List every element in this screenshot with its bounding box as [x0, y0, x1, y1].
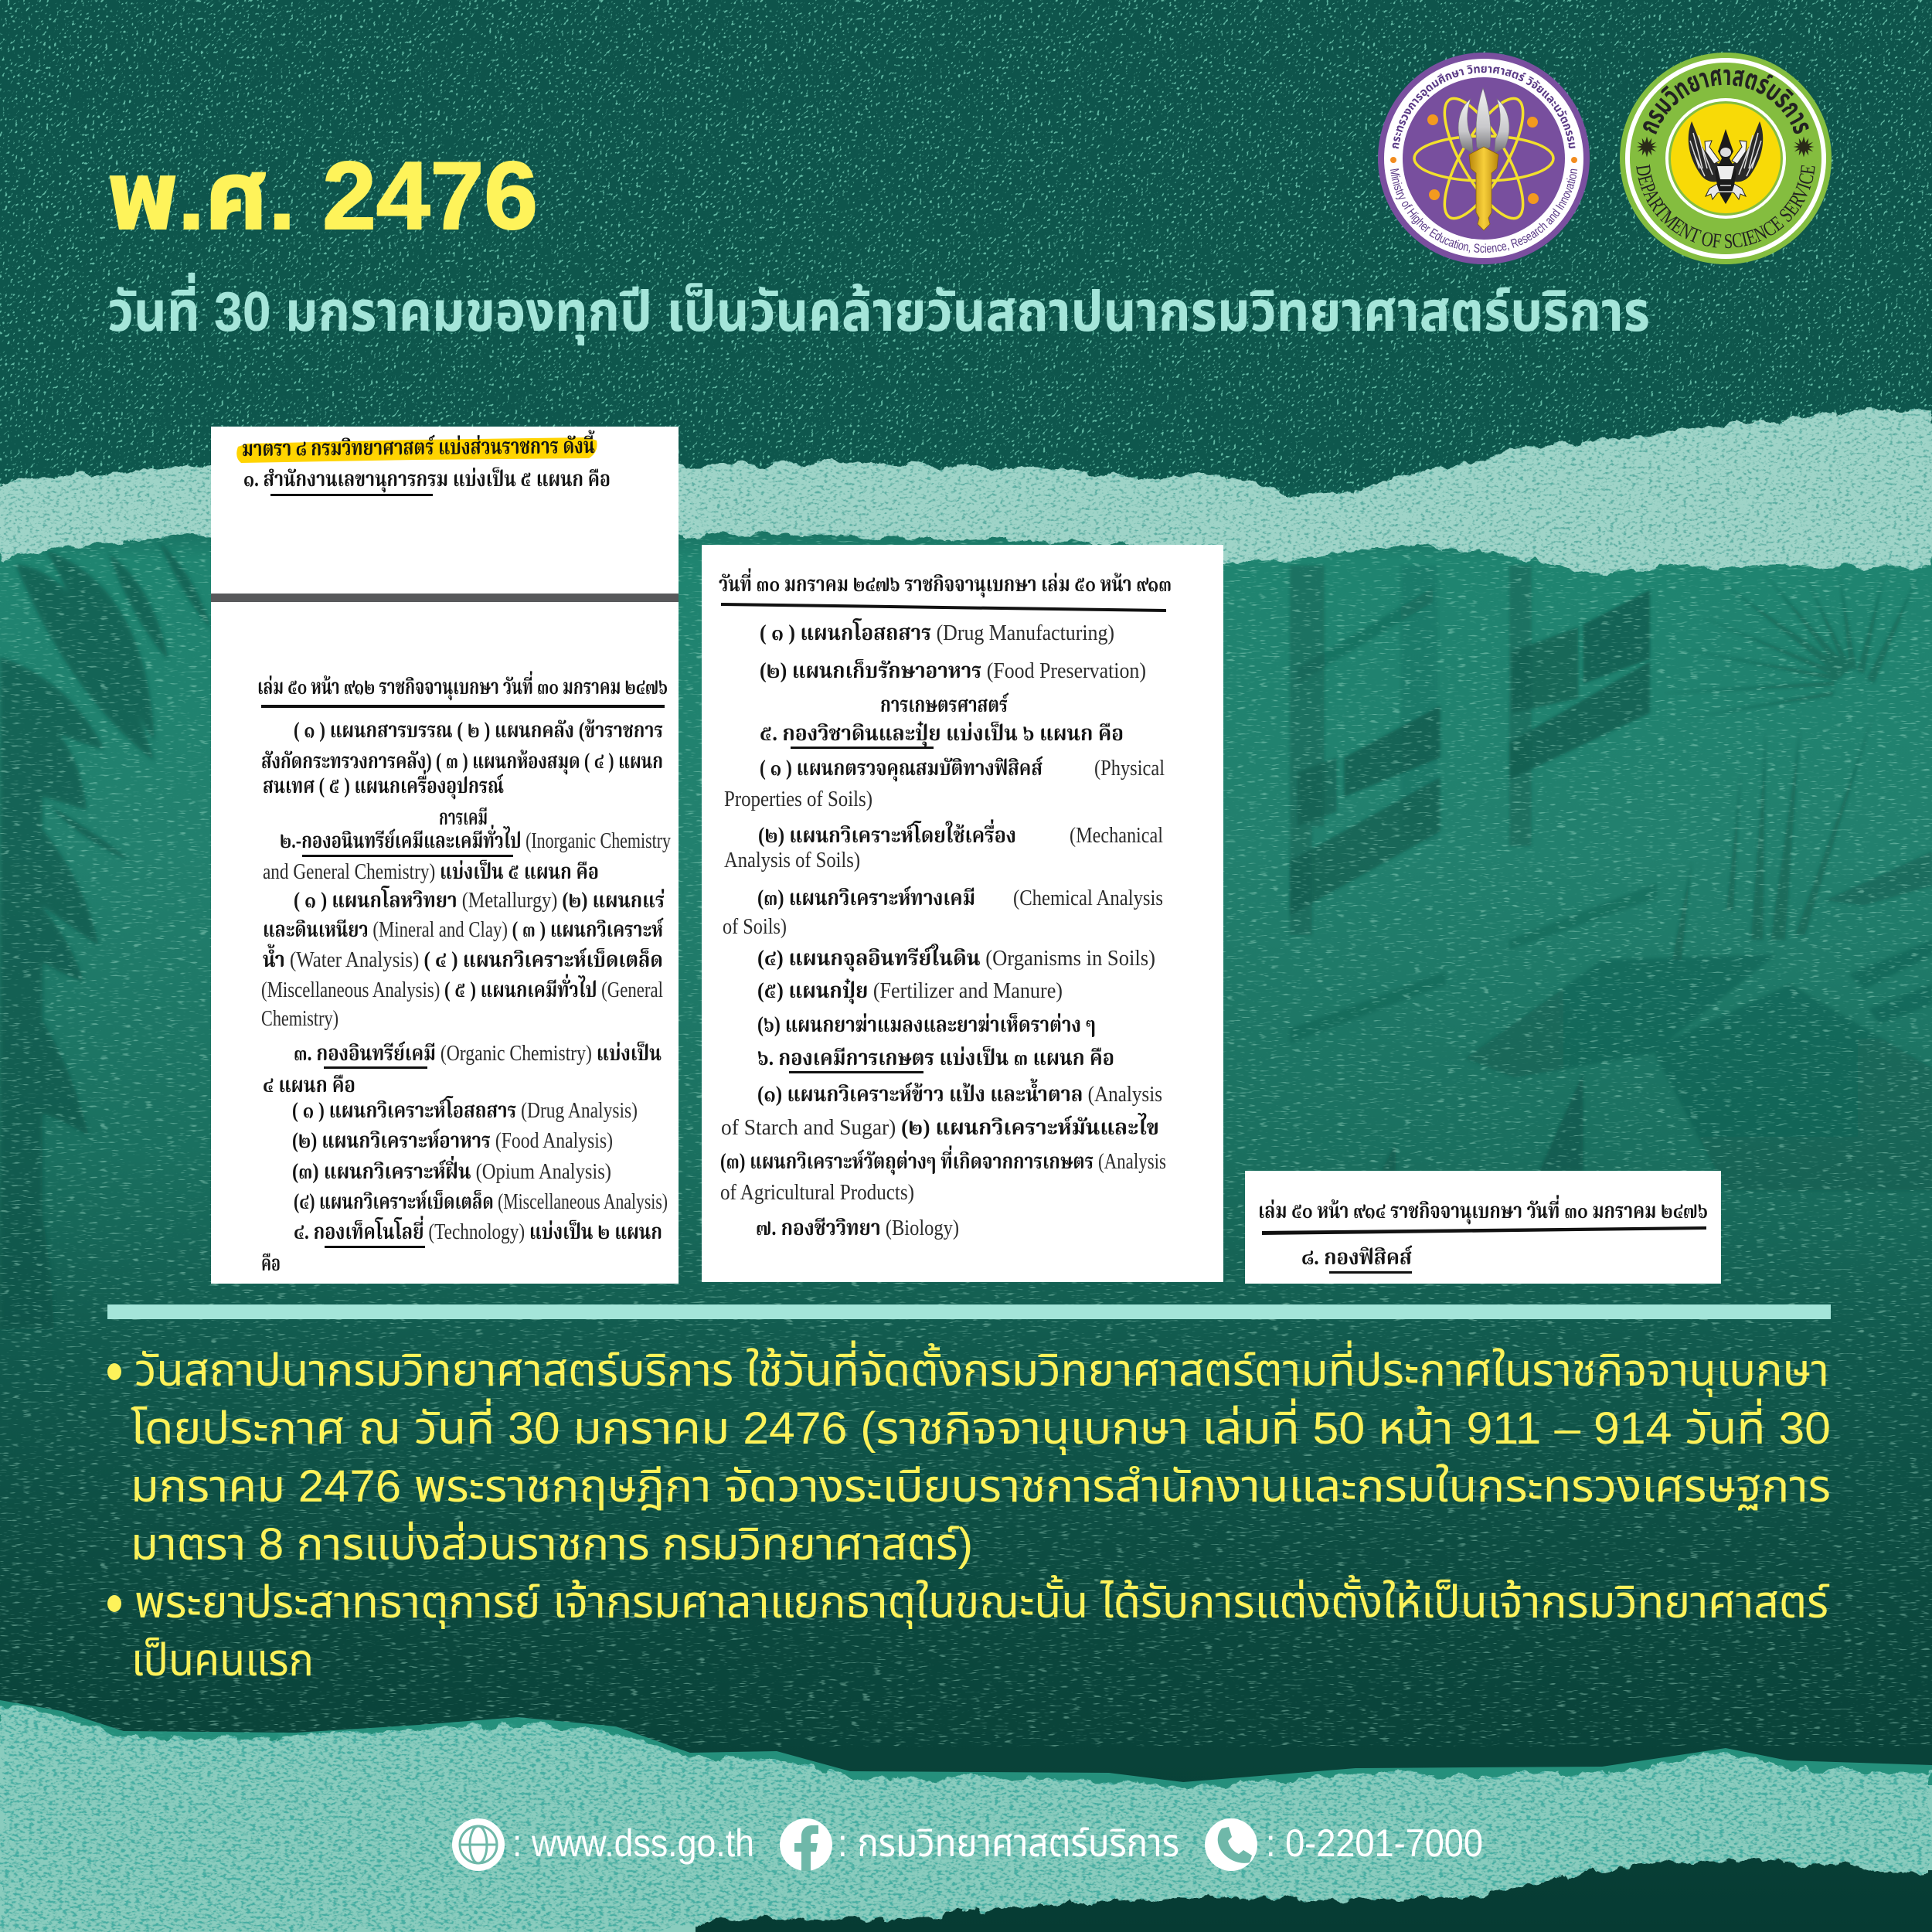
- document panel 2: page 913: วันที่ ๓๐ มกราคม ๒๔๗๖ ราชกิจจานุเบกษา เล่ม ๕๐ หน้า ๙๑๓: [719, 568, 1172, 598]
- highlighted heading: มาตรา ๘ กรมวิทยาศาสตร์ แบ่งส่วนราชการ ดังนี้: [242, 430, 595, 461]
- document panel 1: section 8 excerpt and page 912: [211, 427, 679, 1284]
- torn paper band: upper: [0, 410, 1932, 574]
- document panel 2: page 913: ๗. กองชีววิทยา (Biology): [756, 1216, 959, 1240]
- document panel 2: page 913: Analysis of Soils): [724, 849, 860, 872]
- document panel 2: page 913: (Physical: [1094, 757, 1165, 781]
- document panel 1: section 8 excerpt and page 912: สนเทศ ( ๕ ) แผนกเครื่องอุปกรณ์: [263, 770, 504, 800]
- body text block: มาตรา 8 การแบ่งส่วนราชการ กรมวิทยาศาสตร์): [131, 1519, 973, 1570]
- document panel 2: page 913: of Soils): [723, 915, 787, 939]
- logo text: ministry Thai name: กระทรวงการอุดมศึกษา วิทยาศาสตร์ วิจัยและนวัตกรรม: [1393, 65, 1575, 148]
- document panel 1: section 8 excerpt and page 912: การเคมี: [439, 806, 488, 830]
- document panel 3: page 914: ๘. กองฟิสิคส์: [1301, 1244, 1413, 1270]
- icon: globe: [452, 1818, 505, 1871]
- logo: ministry emblem: [1378, 53, 1590, 264]
- document panel 1: section 8 excerpt and page 912: (Miscellaneous Analysis) ( ๕ ) แผนกเคมีทั่วไป (General: [261, 974, 663, 1002]
- document panel 2: page 913: การเกษตรศาสตร์: [880, 692, 1009, 717]
- logo text: ministry English name: Ministry of Higher Education, Science, Research and Innovation: [1389, 168, 1578, 253]
- document panel 3: page 914: [1245, 1171, 1721, 1284]
- document panel 2: page 913: (๓) แผนกวิเคราะห์วัตถุต่างๆ ที่เกิดจากการเกษตร (Analysis: [720, 1145, 1166, 1175]
- body text block: เป็นคนแรก: [131, 1635, 314, 1685]
- document panel 1: section 8 excerpt and page 912: ๔. กองเท็คโนโลยี่ (Technology) แบ่งเป็น ๒ แผนก: [294, 1216, 662, 1244]
- garuda: [1689, 121, 1763, 204]
- body text block: [107, 1340, 1831, 1685]
- document panel 1: section 8 excerpt and page 912: ๒.-กองอนินทรีย์เคมีและเคมีทั่วไป (Inorganic Chemistry: [280, 825, 671, 853]
- document panel 1: section 8 excerpt and page 912: (๒) แผนกวิเคราะห์อาหาร (Food Analysis): [292, 1128, 613, 1153]
- bullet 2: [107, 1595, 121, 1612]
- title: พ.ศ. 2476: [107, 143, 538, 250]
- highlight: [236, 437, 597, 463]
- document panel 1: section 8 excerpt and page 912: ( ๑ ) แผนกสารบรรณ ( ๒ ) แผนกคลัง (ข้าราชการ: [294, 719, 663, 743]
- document panel 2: page 913: (๕) แผนกปุ๋ย (Fertilizer and Manure): [757, 978, 1063, 1005]
- document panel 2: page 913: (๑) แผนกวิเคราะห์ข้าว แป้ง และน้ำตาล (Analysis: [757, 1078, 1162, 1107]
- document panel 3: page 914: เล่ม ๕๐ หน้า ๙๑๔ ราชกิจจานุเบกษา วันที่ ๓๐ มกราคม ๒๔๗๖: [1258, 1195, 1708, 1225]
- document panel 2: page 913: (Mechanical: [1070, 824, 1163, 848]
- subtitle: วันที่ 30 มกราคมของทุกปี เป็นวันคล้ายวันสถาปนากรมวิทยาศาสตร์บริการ: [107, 273, 1650, 345]
- document panel 2: page 913: (๒) แผนกเก็บรักษาอาหาร (Food Preservation): [760, 658, 1146, 683]
- background texture specks: upper: [0, 0, 1932, 510]
- atom orbits: [1414, 88, 1553, 229]
- icon: phone: [1205, 1818, 1257, 1871]
- bullet 1: [107, 1363, 121, 1380]
- document panel 1: section 8 excerpt and page 912: and General Chemistry) แบ่งเป็น ๕ แผนก คือ: [263, 859, 599, 884]
- website: : www.dss.go.th: [512, 1821, 754, 1865]
- body text block: มกราคม 2476 พระราชกฤษฎีกา จัดวางระเบียบราชการสำนักงานและกรมในกระทรวงเศรษฐการ: [131, 1461, 1831, 1512]
- facebook page name: : กรมวิทยาศาสตร์บริการ: [838, 1821, 1179, 1865]
- background photo: palm shadows left: [0, 541, 212, 1329]
- document panel 2: page 913: ( ๑ ) แผนกโอสถสาร (Drug Manufacturing): [760, 617, 1114, 645]
- document panel 1: section 8 excerpt and page 912: ( ๑ ) แผนกวิเคราะห์โอสถสาร (Drug Analysis): [292, 1095, 638, 1123]
- document panel 1: section 8 excerpt and page 912: สังกัดกระทรวงการคลัง) ( ๓ ) แผนกห้องสมุด ( ๔ ) แผนก: [261, 750, 663, 775]
- logo: department of science service emblem: [1620, 53, 1832, 264]
- document panel 2: page 913: ๖. กองเคมีการเกษตร แบ่งเป็น ๓ แผนก คือ: [757, 1046, 1114, 1070]
- document panel 2: page 913: ๕. กองวิชาดินและปุ๋ย แบ่งเป็น ๖ แผนก คือ: [760, 721, 1124, 747]
- document panel 2: page 913: of Starch and Sugar) (๒) แผนกวิเคราะห์มันและไข: [721, 1112, 1159, 1140]
- document panel 1: section 8 excerpt and page 912: คือ: [261, 1252, 281, 1276]
- logo text: department Thai name: กรมวิทยาศาสตร์บริการ: [1643, 68, 1809, 134]
- document panel 1: section 8 excerpt and page 912: และดินเหนียว (Mineral and Clay) ( ๓ ) แผนกวิเคราะห์: [263, 917, 664, 942]
- document panel 1: section 8 excerpt and page 912: ( ๑ ) แผนกโลหวิทยา (Metallurgy) (๒) แผนกแร่: [294, 885, 665, 913]
- body text block: โดยประกาศ ณ วันที่ 30 มกราคม 2476 (ราชกิจจานุเบกษา เล่มที่ 50 หน้า 911 – 914 วันที่ 30: [131, 1398, 1831, 1455]
- logo text: department English name: DEPARTMENT OF SCIENCE SERVICE: [1636, 164, 1815, 249]
- document panel 2: page 913: Properties of Soils): [724, 787, 872, 811]
- trident: [1458, 88, 1509, 230]
- document panel 2: page 913: (๒) แผนกวิเคราะห์โดยใช้เครื่อง: [758, 819, 1016, 848]
- document panel 1: section 8 excerpt and page 912: ๑. สำนักงานเลขานุการกรม แบ่งเป็น ๕ แผนก คือ: [243, 467, 611, 493]
- document panel 1: section 8 excerpt and page 912: Chemistry): [261, 1007, 338, 1031]
- document panel 1: section 8 excerpt and page 912: ๔ แผนก คือ: [263, 1073, 355, 1097]
- document panel 1: section 8 excerpt and page 912: (๔) แผนกวิเคราะห์เบ็ดเตล็ด (Miscellaneous Analysis): [294, 1189, 668, 1214]
- divider bar: [107, 1304, 1831, 1319]
- footer contacts: [452, 1818, 1483, 1871]
- background texture specks: lower: [0, 510, 1932, 1747]
- document panel 2: page 913: of Agricultural Products): [720, 1181, 914, 1205]
- document panel 1: section 8 excerpt and page 912: ๓. กองอินทรีย์เคมี (Organic Chemistry) แบ่งเป็น: [294, 1040, 662, 1066]
- document panel 1: section 8 excerpt and page 912: เล่ม ๕๐ หน้า ๙๑๒ ราชกิจจานุเบกษา วันที่ ๓๐ มกราคม ๒๔๗๖: [257, 671, 668, 701]
- document panel 2: page 913: ( ๑ ) แผนกตรวจคุณสมบัติทางฟิสิคส์: [760, 755, 1043, 782]
- document panel 2: page 913: (๓) แผนกวิเคราะห์ทางเคมี: [757, 885, 975, 910]
- document panel 1: section 8 excerpt and page 912: (๓) แผนกวิเคราะห์ฝิ่น (Opium Analysis): [292, 1156, 611, 1184]
- torn paper band: lower edge highlight: [0, 1700, 1932, 1824]
- document panel 2: page 913: (๖) แผนกยาฆ่าแมลงและยาฆ่าเห็ดราต่าง ๆ: [757, 1012, 1096, 1037]
- document panel 2: page 913: (Chemical Analysis: [1013, 886, 1163, 910]
- background photo: building and palm right: [1290, 565, 1932, 1190]
- torn paper band: lower: [0, 1704, 1932, 1932]
- document panel 1: section 8 excerpt and page 912: น้ำ (Water Analysis) ( ๔ ) แผนกวิเคราะห์เบ็ดเตล็ด: [263, 944, 663, 972]
- icon: facebook: [780, 1818, 832, 1871]
- body text block: พระยาประสาทธาตุการย์ เจ้ากรมศาลาแยกธาตุในขณะนั้น ได้รับการแต่งตั้งให้เป็นเจ้ากรมวิทยาศาสตร์: [134, 1574, 1830, 1629]
- document panel 2: page 913: [702, 545, 1223, 1282]
- phone number: : 0-2201-7000: [1266, 1821, 1483, 1865]
- document panel 2: page 913: (๔) แผนกจุลอินทรีย์ในดิน (Organisms in Soils): [757, 943, 1155, 972]
- body text block: วันสถาปนากรมวิทยาศาสตร์บริการ ใช้วันที่จัดตั้งกรมวิทยาศาสตร์ตามที่ประกาศในราชกิจจานุเบกษา: [134, 1340, 1829, 1397]
